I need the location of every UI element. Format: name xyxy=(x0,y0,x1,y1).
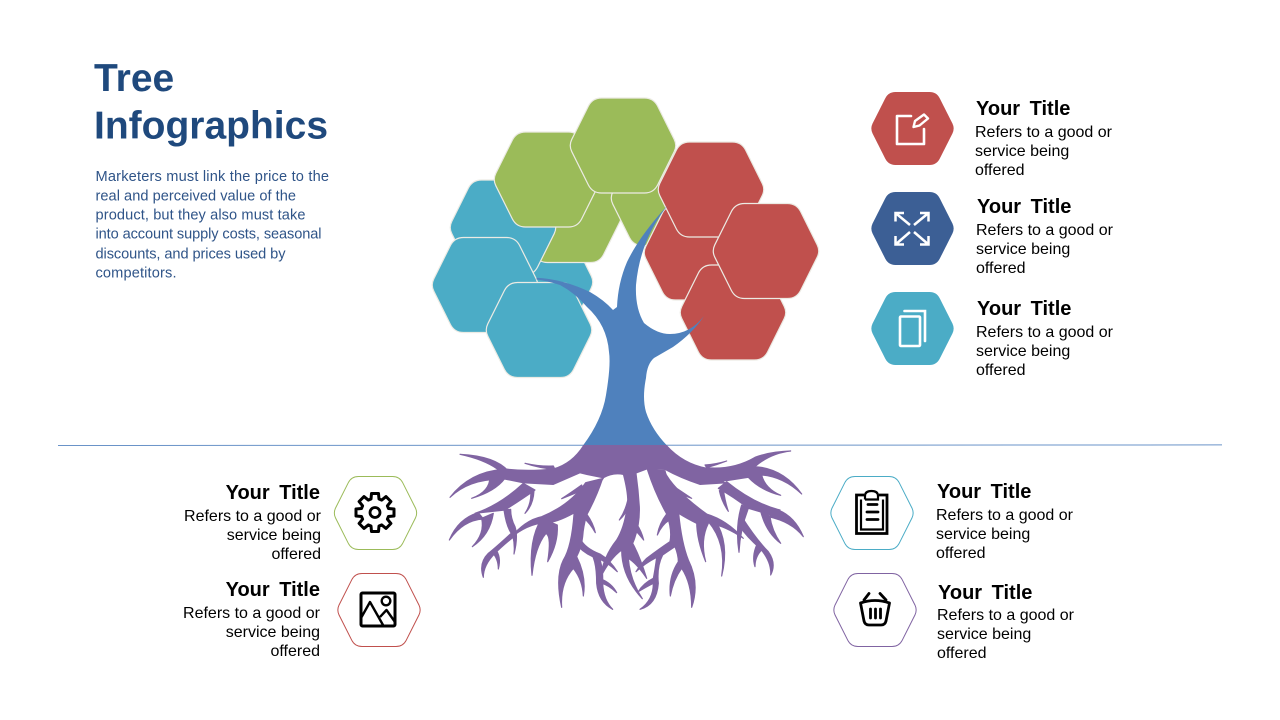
item: purple basket xyxy=(834,574,1075,662)
ground line xyxy=(58,444,1222,446)
text: red item: service being xyxy=(975,143,1069,160)
text: teal outlined item: Refers to a good or xyxy=(936,507,1074,524)
text: teal item: offered xyxy=(976,362,1026,379)
text: blue item: Your Title xyxy=(977,196,1071,218)
leaf: red back xyxy=(644,205,750,300)
root: right second arm xyxy=(718,482,803,575)
item: teal copy xyxy=(871,292,1114,379)
root: left second arm xyxy=(449,483,535,577)
text: red outlined item: service being xyxy=(226,624,320,641)
root: central mass xyxy=(498,445,727,485)
text: teal item: Refers to a good or xyxy=(976,324,1114,341)
leaf: red bottom xyxy=(680,265,786,360)
text: red outlined item xyxy=(183,579,321,660)
tree roots xyxy=(449,445,803,609)
text: teal outlined item: offered xyxy=(936,545,986,562)
tree trunk and branches xyxy=(536,205,704,446)
text: teal outlined item: Your Title xyxy=(937,481,1031,503)
leaf: green lower middle xyxy=(516,168,622,262)
text: green item: offered xyxy=(271,546,321,563)
leaf: red top xyxy=(658,142,764,237)
text: green item: service being xyxy=(227,527,321,544)
icon: outlined hexagon with clipboard glyph xyxy=(831,476,913,550)
description text block: discounts, and prices used by xyxy=(96,246,286,262)
icon: teal hexagon with copy glyph xyxy=(871,292,954,365)
root: right third arm xyxy=(664,471,743,576)
leaf: green back right xyxy=(611,150,717,246)
description text block: competitors. xyxy=(96,266,176,282)
text: purple item: Your Title xyxy=(938,582,1032,604)
description text block: Marketers must link the price to the xyxy=(96,169,329,185)
text: red item: offered xyxy=(975,162,1025,179)
item: green gear xyxy=(184,476,417,563)
text: purple item: offered xyxy=(937,645,987,662)
text: blue item: service being xyxy=(976,241,1070,258)
icon: outlined hexagon with basket glyph xyxy=(834,574,916,646)
text: green item xyxy=(184,482,322,563)
text: green item: Your Title xyxy=(226,482,320,504)
leaf: teal left xyxy=(432,238,538,332)
text: blue item: Refers to a good or xyxy=(976,222,1114,239)
text: red item: Your Title xyxy=(976,98,1070,120)
description text block: real and perceived value of the xyxy=(96,188,296,204)
item: red image xyxy=(183,574,420,660)
leaf: red right xyxy=(713,204,819,298)
root: right upper arm xyxy=(705,451,802,495)
text: green item: Refers to a good or xyxy=(184,508,322,525)
root: left upper arm xyxy=(450,454,555,498)
description text block: product, but they also must take xyxy=(96,208,306,224)
text: red outlined item: Refers to a good or xyxy=(183,605,321,622)
text: red item: Refers to a good or xyxy=(975,124,1113,141)
text: teal item: Your Title xyxy=(977,298,1071,320)
icon: blue hexagon with expand glyph xyxy=(871,192,954,265)
leaf: teal back right xyxy=(487,234,593,330)
item: blue expand xyxy=(871,192,1114,277)
icon: outlined hexagon with gear glyph xyxy=(334,476,417,550)
leaf: green left xyxy=(494,132,600,227)
description text block xyxy=(96,169,329,282)
item: red edit xyxy=(871,92,1113,179)
tree canopy: hexagon leaves xyxy=(432,98,819,378)
root: centre xyxy=(600,473,647,599)
text: red outlined item: offered xyxy=(270,643,320,660)
title xyxy=(94,57,328,148)
leaf: teal bottom xyxy=(486,282,592,378)
title: Tree xyxy=(94,57,174,100)
icon: red hexagon with edit glyph xyxy=(871,92,954,165)
icon: outlined hexagon with image glyph xyxy=(338,574,420,646)
text: blue item: offered xyxy=(976,260,1026,277)
text: teal outlined item xyxy=(936,481,1074,562)
text: red outlined item: Your Title xyxy=(226,579,320,601)
root: left third arm xyxy=(510,478,603,575)
title: Infographics xyxy=(94,104,328,148)
text: purple item: service being xyxy=(937,626,1031,643)
leaf: teal upper xyxy=(450,180,556,275)
description text block: into account supply costs, seasonal xyxy=(96,226,322,242)
text: teal item xyxy=(976,298,1114,379)
text: purple item xyxy=(937,582,1075,662)
leaf: green top xyxy=(570,98,676,193)
text: red item xyxy=(975,98,1113,179)
text: teal outlined item: service being xyxy=(936,526,1030,543)
root: left centre xyxy=(559,478,617,609)
item: teal clipboard xyxy=(831,476,1074,562)
text: purple item: Refers to a good or xyxy=(937,607,1075,624)
text: blue item xyxy=(976,196,1114,277)
root: right centre xyxy=(636,469,695,609)
text: teal item: service being xyxy=(976,343,1070,360)
